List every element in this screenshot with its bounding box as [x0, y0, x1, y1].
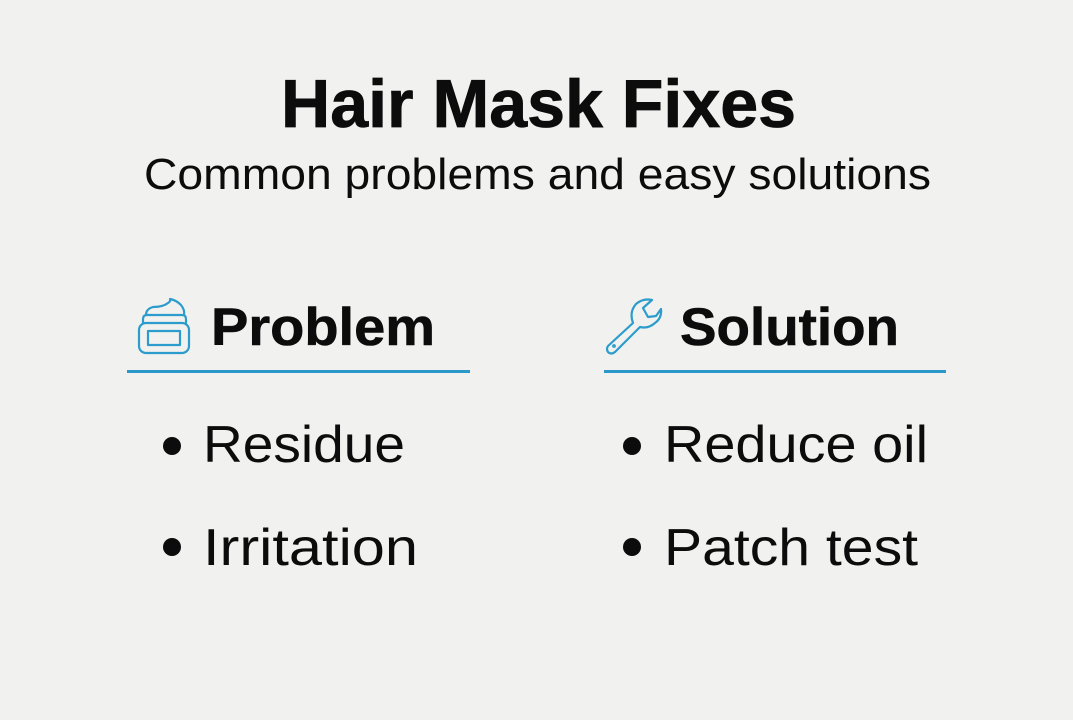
panel: solution column — [604, 298, 946, 577]
underline: solution — [604, 370, 946, 373]
list item: Reduce oil: Reduce oil — [664, 416, 928, 474]
icon: wrench — [607, 300, 661, 354]
icon: cream jar — [139, 299, 189, 353]
panel: problem column — [127, 298, 470, 577]
list item: Irritation: Irritation — [203, 519, 418, 577]
list item: Residue: Residue — [203, 416, 405, 474]
list item: Patch test: Patch test — [664, 519, 919, 577]
heading: Problem: Problem — [211, 298, 435, 357]
title: Hair Mask Fixes — [281, 66, 796, 142]
underline: problem — [127, 370, 470, 373]
heading: Solution: Solution — [680, 298, 899, 357]
subtitle: Common problems and easy solutions — [144, 150, 931, 199]
